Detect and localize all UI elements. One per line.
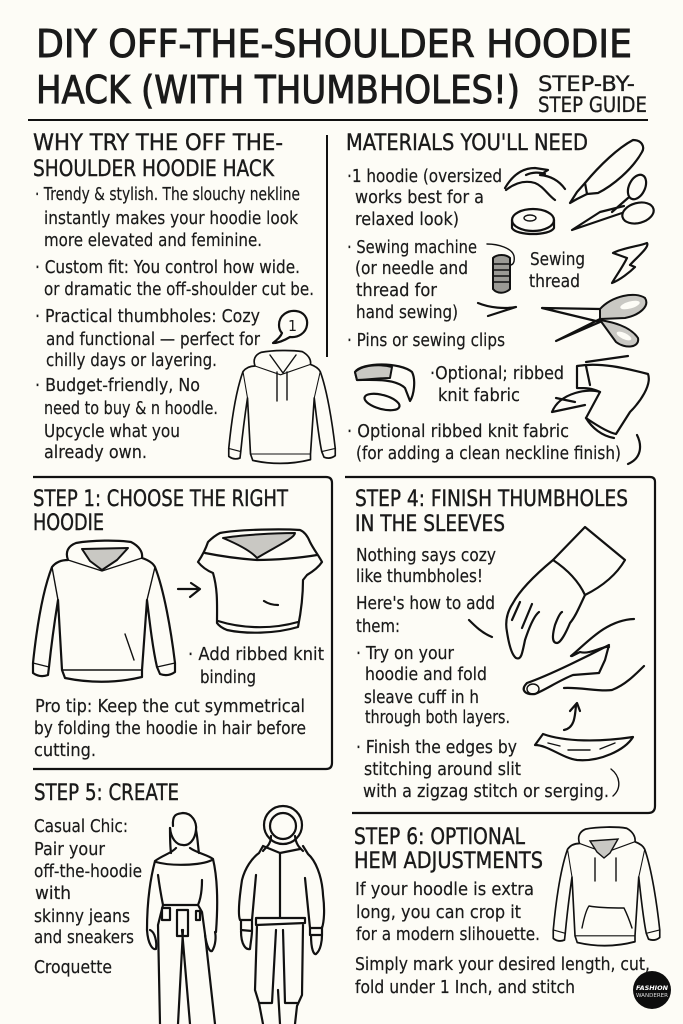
text block: materials list: ·Optional; ribbed — [430, 364, 564, 384]
panel: why try the hack — [33, 131, 335, 463]
label: sewing thread: Sewing — [530, 250, 585, 270]
heading: why try — [33, 131, 283, 182]
icon: hoodie with pocket — [553, 827, 660, 946]
subtitle: step-by-step guide: STEP GUIDE — [538, 93, 647, 117]
icon: speech bubble — [273, 311, 307, 343]
text block: materials list: · Pins or sewing clips — [347, 331, 505, 351]
panel border: step 1 — [33, 477, 332, 769]
text block: reasons: · Budget-friendly, No — [35, 376, 200, 396]
icon: needle — [478, 303, 516, 316]
title: DIY OFF-THE-SHOULDER HOODIE — [36, 22, 632, 66]
icon: marker pen — [570, 140, 643, 203]
text block: thumbhole instructions: like thumbholes! — [356, 567, 483, 587]
text block: reasons: · Custom fit: You control how wide. — [35, 258, 300, 278]
heading: step 1: HOODIE — [33, 511, 104, 536]
panel: step 6 — [354, 825, 660, 998]
icon: large scissors — [542, 295, 646, 347]
text block: pro tip: cutting. — [34, 741, 96, 761]
subtitle: step-by-step guide — [538, 72, 647, 117]
text block: thumbhole instructions: stitching around slit — [364, 760, 521, 780]
text block: pro tip: by folding the hoodie in hair before — [34, 719, 306, 739]
text block: materials list: knit fabric — [438, 386, 520, 406]
text block: reasons: and functional — perfect for — [46, 330, 261, 350]
heading: step 4: IN THE SLEEVES — [355, 512, 505, 537]
heading: step 4: STEP 4: FINISH THUMBHOLES — [355, 487, 628, 512]
text block: reasons: Upcycle what you — [44, 422, 180, 442]
text block: thumbhole instructions: with a zigzag stitch or serging. — [363, 782, 609, 802]
text block: casual chic: with — [35, 884, 71, 904]
text block: hem instructions — [355, 880, 650, 998]
heading: step 6: HEM ADJUSTMENTS — [354, 849, 543, 874]
arrow — [178, 583, 200, 597]
text block: thumbhole instructions: hoodie and fold — [365, 665, 487, 685]
icon: cropped off-shoulder hoodie — [198, 529, 322, 633]
icon: full hoodie — [33, 541, 175, 682]
heading: step 6: STEP 6: OPTIONAL — [354, 825, 526, 850]
text block: materials list: · Optional ribbed knit fabric — [347, 422, 569, 442]
text block: materials list: · Sewing machine — [347, 238, 477, 258]
text block: pro tip — [34, 697, 306, 761]
logo: fashion wanderer: FASHION — [636, 984, 669, 992]
text block: materials list: works best for a — [355, 188, 484, 208]
text block: casual chic: Pair your — [34, 840, 106, 860]
text block: casual chic — [34, 817, 142, 978]
text block: thumbhole instructions: · Finish the edges by — [356, 738, 517, 758]
text block: hem instructions: long, you can crop it — [356, 903, 521, 923]
text block: hem instructions: Simply mark your desired length, cut, — [355, 955, 650, 975]
text block: reasons: · Trendy & stylish. The slouchy nekline — [35, 185, 300, 205]
text block: binding note — [188, 645, 324, 688]
text block: casual chic: off-the-hoodie — [34, 862, 142, 882]
text block: casual chic: skinny jeans — [34, 907, 130, 927]
icon: squiggle — [612, 243, 647, 283]
title — [36, 22, 632, 112]
panel: step 5 — [34, 781, 324, 1024]
text block: materials list: ·1 hoodie (oversized — [347, 167, 502, 187]
text block: thumbhole instructions: Here's how to add — [356, 594, 495, 614]
heading: why try: SHOULDER HOODIE HACK — [33, 157, 274, 182]
text block: materials list — [347, 167, 621, 464]
icon: finger through thumbhole — [524, 619, 644, 694]
icon: folded fabric — [552, 356, 649, 464]
text block: reasons: instantly makes your hoodie look — [44, 209, 299, 229]
text block: binding note: binding — [200, 668, 256, 688]
heading: materials: MATERIALS YOU'LL NEED — [346, 131, 588, 156]
icon: button — [512, 209, 554, 234]
title: HACK (WITH THUMBHOLES!) — [36, 68, 520, 112]
icon: hoodie — [229, 350, 335, 463]
text block: hem instructions: for a modern slihouette. — [356, 925, 540, 945]
text block: reasons: already own. — [44, 443, 147, 463]
text block: hem instructions: fold under 1 Inch, and stitch — [355, 978, 575, 998]
icon: small scissors — [572, 172, 656, 230]
text block: casual chic: Casual Chic: — [34, 817, 128, 837]
icon: speech bubble: 1 — [288, 317, 297, 335]
text block: materials list: (for adding a clean neckline finish) — [356, 444, 621, 464]
text block: thumbhole instructions: · Try on your — [356, 644, 455, 664]
icon: curved cuff strip — [535, 734, 633, 796]
text block: materials list: (or needle and — [355, 259, 468, 279]
panel border: step 4 — [345, 477, 655, 813]
subtitle: step-by-step guide: STEP-BY- — [538, 72, 635, 96]
text block: reasons: or dramatic the off-shoulder cut be. — [44, 280, 314, 300]
text block: reasons: chilly days or layering. — [46, 351, 217, 371]
text block: materials list: thread for — [356, 281, 438, 301]
text block: hem instructions: If your hoodle is extra — [355, 880, 534, 900]
panel: step 4 — [345, 477, 655, 813]
figure: woman in off-shoulder hoodie — [147, 813, 217, 1024]
text block: casual chic: and sneakers — [34, 928, 134, 948]
text block: reasons — [35, 185, 314, 463]
text block: reasons: more elevated and feminine. — [44, 231, 262, 251]
label: sewing thread: thread — [529, 272, 580, 292]
heading: step 5: STEP 5: CREATE — [34, 781, 179, 806]
icon: ribbed band — [355, 364, 414, 413]
panel: step 1 — [33, 477, 332, 769]
heading: step 6 — [354, 825, 543, 874]
text block: casual chic: Croquette — [34, 958, 112, 978]
logo: fashion wanderer: WANDERER — [636, 993, 669, 999]
text block: binding note: · Add ribbed knit — [188, 645, 324, 665]
arrow — [564, 703, 580, 730]
text block: pro tip: Pro tip: Keep the cut symmetrical — [35, 697, 305, 717]
panel: materials — [346, 131, 656, 464]
icon: cuffed hand — [469, 527, 625, 658]
icon: fabric scrap curve — [505, 168, 565, 200]
text block: thumbhole instructions: sleave cuff in h — [364, 688, 479, 708]
figure: person in zip hoodie — [239, 806, 324, 1024]
text block: thumbhole instructions: Nothing says cozy — [356, 546, 496, 566]
heading: step 1 — [33, 487, 288, 536]
text block: thumbhole instructions: through both layers. — [365, 708, 510, 728]
text block: reasons: · Practical thumbholes: Cozy — [35, 307, 260, 327]
text block: materials list: relaxed look) — [355, 210, 459, 230]
text block: thumbhole instructions — [356, 546, 609, 802]
logo: fashion wanderer — [633, 971, 671, 1009]
text block: materials list: hand sewing) — [356, 303, 458, 323]
text block: thumbhole instructions: them: — [356, 617, 400, 637]
label: sewing thread — [529, 250, 585, 292]
heading: step 4 — [355, 487, 628, 537]
text block: reasons: need to buy & n hoodle. — [44, 399, 218, 419]
heading: step 1: STEP 1: CHOOSE THE RIGHT — [33, 487, 288, 512]
heading: why try: WHY TRY THE OFF THE- — [33, 131, 283, 156]
icon: thread spool — [487, 244, 514, 293]
